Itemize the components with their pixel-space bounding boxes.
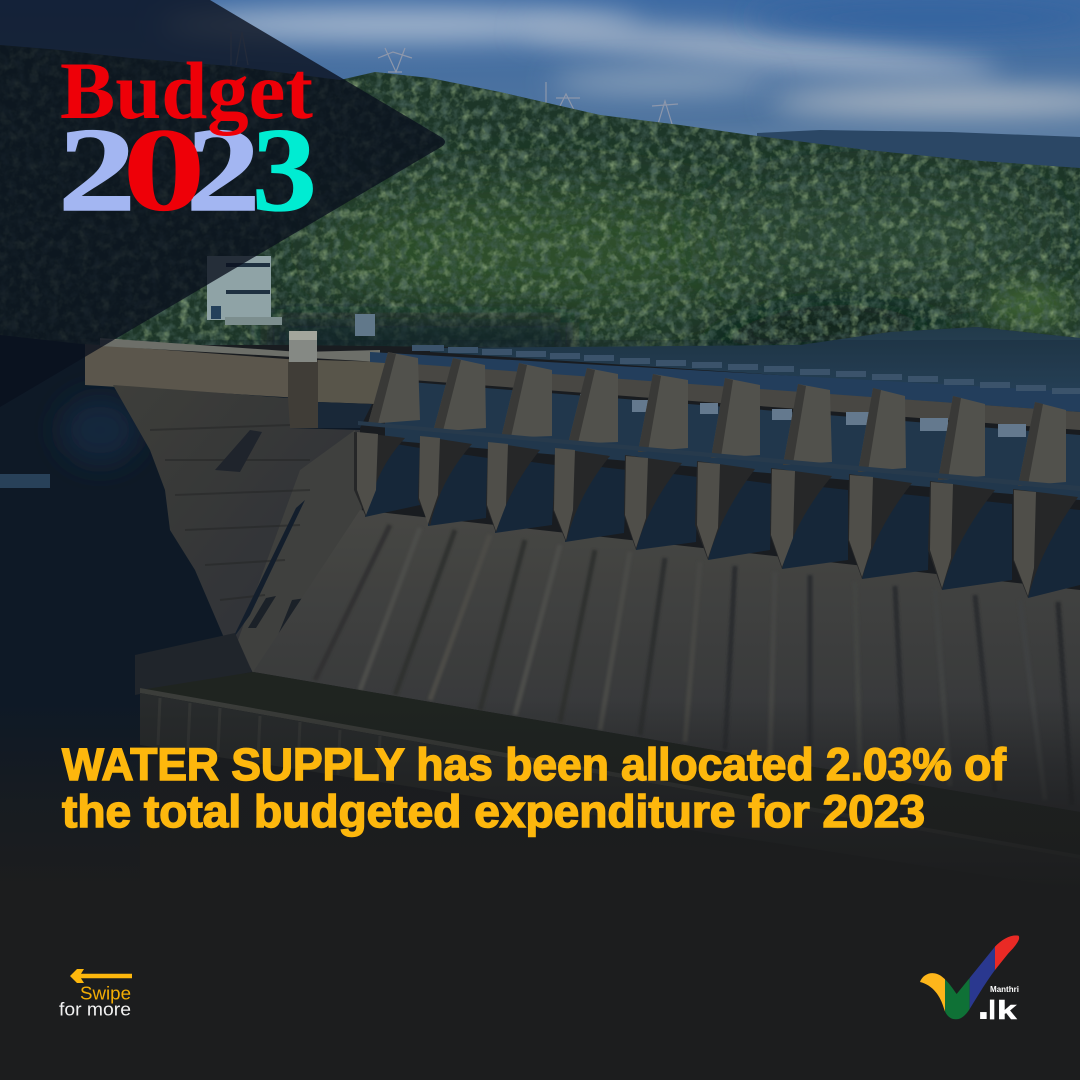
digit second 2: 2: [186, 104, 260, 237]
left concrete wall: [85, 344, 300, 398]
powerhouse building: [207, 256, 282, 325]
sky: [0, 0, 1080, 200]
brand domain: k: [997, 995, 1017, 1025]
Manthri.lk logo: [920, 935, 1020, 1020]
Budget wordmark: Budget: [60, 45, 313, 136]
service walkway: [358, 421, 1080, 491]
brand domain: l: [988, 995, 996, 1025]
for more label: for more: [59, 1000, 131, 1020]
brand domain: .: [977, 977, 990, 1029]
brand small label: Manthri: [990, 984, 1019, 994]
swipe label: Swipe: [80, 984, 131, 1004]
bottom dark fade: [0, 700, 1080, 890]
forested hillside: [0, 40, 1080, 352]
headline line 2: the total budgeted expenditure for 2023: [62, 786, 925, 837]
main spillway face: [253, 510, 1080, 812]
stepped left spillway: [113, 385, 360, 673]
pylons: [231, 32, 678, 124]
digit 2: 2: [58, 104, 136, 237]
wing wall: [135, 633, 252, 695]
headline: [62, 739, 1007, 837]
brand domain: [977, 977, 1017, 1029]
dimming overlay on dam: [0, 340, 1080, 880]
headline line 1: WATER SUPPLY has been allocated 2.03% of: [62, 739, 1007, 790]
distant hill: [757, 130, 1080, 175]
logo: Budget 2023: [58, 45, 317, 237]
left low hill and trees: [0, 335, 360, 890]
digit 3: 3: [252, 104, 317, 237]
dark arrow-shaped panel: [0, 0, 445, 407]
icon: tricolour check mark: [920, 935, 1020, 1020]
dam crest deck: [370, 352, 1080, 412]
gatehouse: [289, 331, 317, 362]
small left building: [0, 474, 50, 488]
swipe prompt: [59, 969, 132, 1020]
far building: [355, 314, 375, 336]
icon: left arrow: [70, 969, 132, 983]
upper piers: [368, 352, 1066, 486]
spillway radial gates: [365, 440, 1080, 598]
background: dam photograph: [0, 0, 1080, 830]
reservoir water: [430, 327, 1080, 395]
gate bays (blue steel behind piers): [385, 380, 1080, 500]
lower piers: [354, 432, 1078, 598]
spillway pool and lip: [140, 672, 1080, 857]
digit 0: 0: [122, 103, 206, 236]
